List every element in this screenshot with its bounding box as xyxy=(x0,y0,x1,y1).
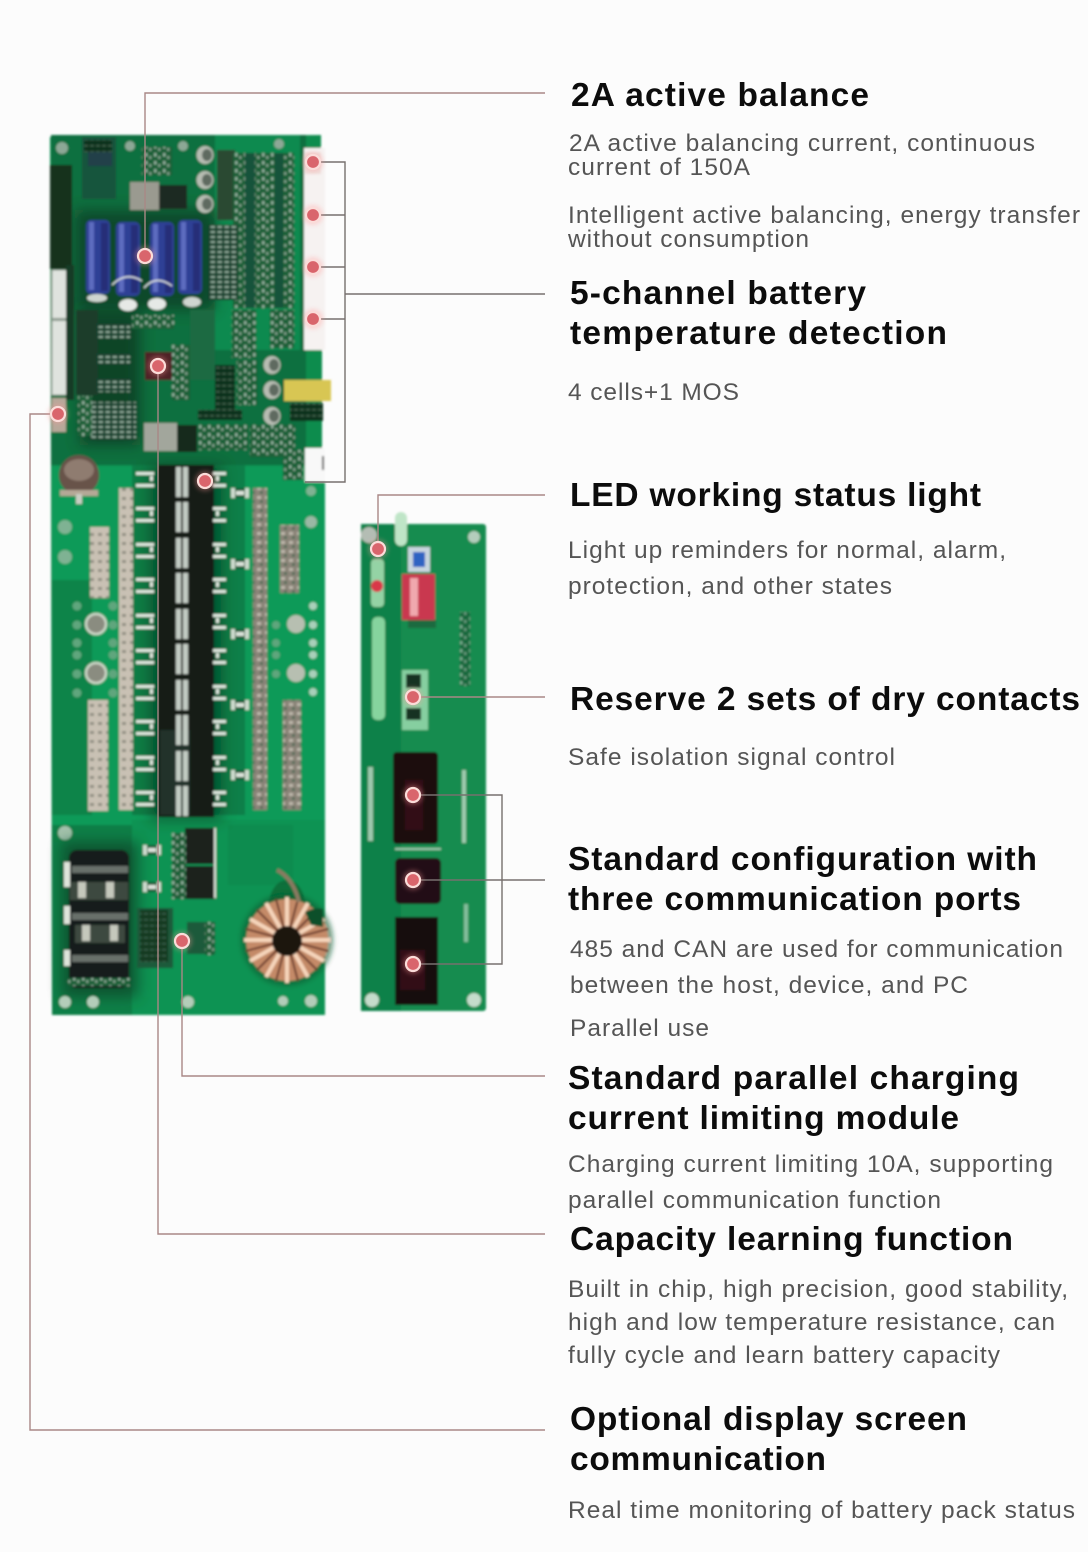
callout leader: temperature detection xyxy=(303,152,545,482)
callout leader: dry contacts xyxy=(403,687,545,707)
expansion communication board xyxy=(361,512,486,1011)
callout leader: 2A active balance xyxy=(135,93,545,266)
heading xyxy=(568,1060,1019,1137)
current-limit module components xyxy=(137,908,173,968)
communication port 2 xyxy=(395,858,441,904)
heading xyxy=(568,841,1037,918)
mounting holes xyxy=(361,527,377,543)
heading: LED working status light xyxy=(570,477,981,514)
communication port 1 xyxy=(393,752,438,844)
feature: display screen xyxy=(568,1401,1075,1524)
green terminal strip xyxy=(372,617,385,720)
description: protection, and other states xyxy=(568,573,892,600)
SMD rows xyxy=(460,612,470,686)
feature: 2A active balance xyxy=(567,77,1080,253)
description: Light up reminders for normal, alarm, xyxy=(568,537,1006,564)
silver capacitors xyxy=(196,146,214,164)
description: without consumption xyxy=(567,226,809,253)
description: current of 150A xyxy=(568,154,751,181)
LED strip xyxy=(371,559,384,607)
description xyxy=(568,1151,1053,1214)
heading: Optional display screen xyxy=(570,1401,967,1438)
toroid inductor xyxy=(269,880,305,930)
description xyxy=(568,537,1006,600)
heading xyxy=(570,275,947,352)
heading: three communication ports xyxy=(568,881,1021,918)
dry contact connector xyxy=(402,670,428,730)
communication port 3 xyxy=(395,917,438,1005)
description: parallel communication function xyxy=(568,1187,941,1214)
control section ICs xyxy=(76,310,98,395)
LED light post xyxy=(395,512,407,546)
callout leader: display screen xyxy=(30,404,545,1430)
board shape xyxy=(50,135,325,1014)
heading: current limiting module xyxy=(568,1100,959,1137)
blue push switch xyxy=(408,547,430,572)
description: 4 cells+1 MOS xyxy=(568,379,739,406)
callout leader: parallel charging module xyxy=(172,931,545,1076)
description: high and low temperature resistance, can xyxy=(568,1309,1055,1336)
heading xyxy=(570,1401,967,1478)
power inductors xyxy=(58,826,72,840)
feature: communication ports xyxy=(568,841,1063,1042)
lower control row xyxy=(144,423,177,451)
heading: communication xyxy=(570,1441,826,1478)
mounting holes xyxy=(56,142,68,154)
top-left chip module xyxy=(82,137,116,199)
marker on MOSFET xyxy=(195,471,215,491)
description xyxy=(568,1276,1068,1369)
bottom mounting holes xyxy=(59,995,317,1008)
red DIP switch xyxy=(402,574,435,620)
heading: 2A active balance xyxy=(571,77,869,114)
main BMS circuit board xyxy=(50,135,333,1015)
coin cell battery xyxy=(59,455,99,495)
gate resistors xyxy=(231,488,249,498)
description: Intelligent active balancing, energy transfer xyxy=(568,202,1080,229)
silver electrolytics and yellow transformer xyxy=(264,356,280,374)
transistor arrays right of capacitors xyxy=(208,225,238,300)
callout leader: LED status xyxy=(368,495,545,559)
feature: capacity learning xyxy=(568,1221,1068,1369)
feature: dry contacts xyxy=(568,681,1080,771)
inductor and regulator xyxy=(130,182,159,210)
description: 2A active balancing current, continuous xyxy=(569,130,1035,157)
heading: Capacity learning function xyxy=(570,1221,1013,1258)
callout leader: capacity learning xyxy=(148,356,545,1234)
solder strips xyxy=(119,488,133,810)
heading: Standard configuration with xyxy=(568,841,1037,878)
heading: Standard parallel charging xyxy=(568,1060,1019,1097)
feature: parallel charging xyxy=(568,1060,1053,1214)
SMD column arrays xyxy=(233,153,245,308)
description: Safe isolation signal control xyxy=(568,744,895,771)
description: Parallel use xyxy=(570,1015,709,1042)
left ribbon header xyxy=(50,165,72,269)
heading: Reserve 2 sets of dry contacts xyxy=(570,681,1080,718)
white temperature connectors xyxy=(304,148,325,350)
description: fully cycle and learn battery capacity xyxy=(568,1342,1001,1369)
left connector stub xyxy=(52,398,66,432)
description: between the host, device, and PC xyxy=(570,972,968,999)
description xyxy=(570,936,1063,1042)
description: Built in chip, high precision, good stability, xyxy=(568,1276,1068,1303)
description xyxy=(567,130,1080,253)
MOSFET bank xyxy=(158,465,214,817)
heading: temperature detection xyxy=(570,315,947,352)
callout leader: communication ports xyxy=(403,785,545,974)
feature: LED status xyxy=(568,477,1006,600)
description: 485 and CAN are used for communication xyxy=(570,936,1063,963)
board shape xyxy=(361,524,486,1011)
small diodes and output MOSFETs xyxy=(143,845,161,855)
blue electrolytic capacitors xyxy=(86,220,110,294)
feature: temperature detection xyxy=(568,275,947,406)
soft component shadows xyxy=(75,210,215,310)
description: Charging current limiting 10A, supporting xyxy=(568,1151,1053,1178)
through-hole pads xyxy=(58,520,72,534)
heading: 5-channel battery xyxy=(570,275,866,312)
description: Real time monitoring of battery pack status xyxy=(568,1497,1075,1524)
